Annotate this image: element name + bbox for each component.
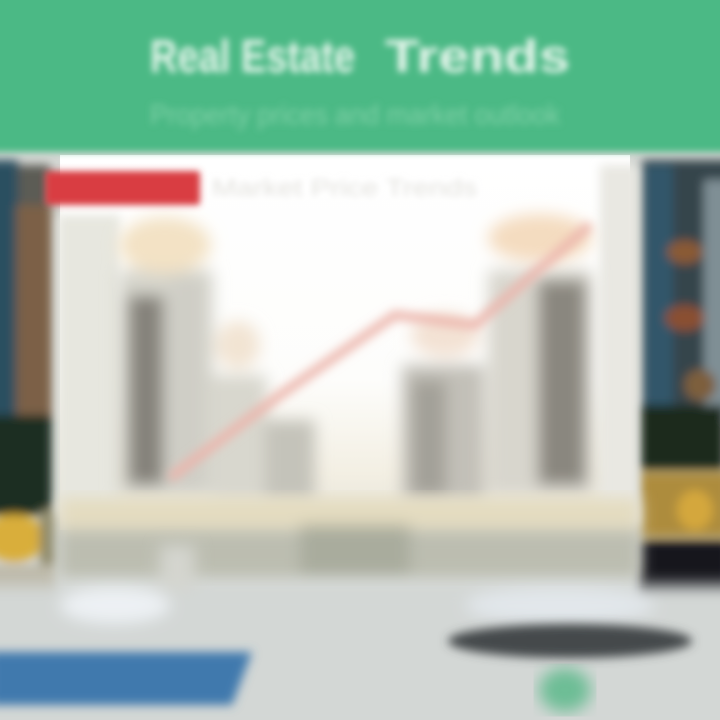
title [150, 30, 570, 82]
right dark building strip [640, 160, 720, 615]
trend line chart [170, 225, 590, 478]
dark ellipse [448, 624, 692, 658]
sky [60, 155, 630, 530]
subtitle: Property prices and market outlook [150, 99, 561, 130]
title: Real Estate [150, 30, 355, 82]
header band [0, 0, 720, 152]
red label [45, 171, 200, 205]
road surface [0, 540, 720, 630]
green spot [539, 668, 591, 712]
left tower group [118, 217, 315, 500]
blue panel [0, 652, 252, 705]
faint caption: Market Price Trends [212, 175, 477, 202]
left dark building strip [0, 160, 55, 625]
right tower group [402, 214, 593, 500]
lower podium band [60, 498, 640, 578]
left white frame column [58, 215, 120, 515]
title: Trends [385, 30, 570, 82]
right white frame column [600, 165, 638, 525]
photo background [0, 150, 720, 720]
